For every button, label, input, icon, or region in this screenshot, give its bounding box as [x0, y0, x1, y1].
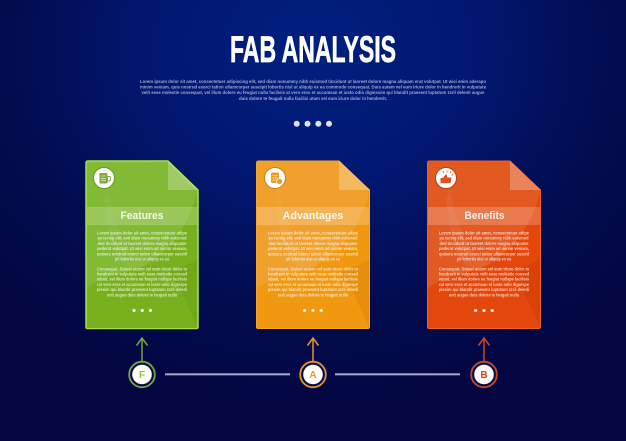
marker: A: [300, 362, 326, 387]
arrow: F up to features: [136, 338, 148, 362]
panel: features: [86, 161, 198, 328]
icon: document with gear: [264, 168, 286, 188]
body text: benefits: pa iscing elit, sed diam nonummy nibh euismod: [440, 236, 529, 241]
body text: benefits: quisera nostrud exerci tation ullamcorper suscid: [439, 251, 529, 256]
body text: features: pederat volutpat. Ut wisi enim ad minim veniam,: [97, 246, 187, 251]
body text: benefits: equat, vel illum dolore eu feugiat nullape facilisis: [439, 277, 530, 282]
marker: B: B: [480, 370, 488, 381]
body text: features: equat, vel illum dolore eu feugiat nullape facilisis: [97, 277, 188, 282]
body text: advantages: pissim qui blandit praesent luptatum zzril deledi: [268, 287, 358, 292]
arrow: B up to benefits: [478, 338, 490, 362]
body text: features: pa iscing elit, sed diam nonummy nibh euismod: [98, 236, 187, 241]
body text: features: ded tincidunt ut laoreet dolore magna aliquame: [98, 241, 187, 246]
body text: advantages: pit lobortis nisl ut aliquip ex ea: [286, 256, 341, 262]
intro text block: [140, 79, 486, 102]
marker: F: [129, 362, 155, 387]
pagination dots: [294, 121, 332, 127]
body text: benefits: [439, 230, 530, 297]
title: FAB ANALYSIS: [230, 29, 396, 70]
intro text block: minim veniam, quis nostrud exerci tation ullamcorper suscipit lobortis nisl ut aliquip ex ea commodo consequat. Duis autem vel eum iriure dolor in hendrerit in vulputate: [140, 85, 486, 91]
body text: benefits: hendrerit in vulputate velit esse molestie consed: [439, 272, 529, 276]
intro text block: velit esse molestie consequat, vel illum dolore eu feugiat nulla facilisis at vero eros et accumsan et iusto odio dignissim qui blandit praesent luptatum zzril delenit augue: [142, 90, 485, 96]
body text: advantages: Consequat. Duiset autem vel eum iriure dolor in: [268, 266, 358, 271]
body text: advantages: equat, vel illum dolore eu feugiat nullape facilisis: [268, 277, 359, 282]
body text: benefits: enit augue duis dolore te feugait nulla: [449, 292, 520, 297]
panel: advantages: [256, 161, 370, 328]
body text: advantages: [268, 230, 359, 297]
timeline connector: F to A: [165, 373, 290, 375]
timeline connector: A to B: [335, 373, 460, 375]
icon: thumbs up: [436, 168, 456, 188]
body text: features: Lorem ipsum dolor sit amet, consectetuer adipe: [97, 230, 188, 236]
body text: features: quisera nostrud exerci tation ullamcorper suscid: [97, 251, 187, 256]
dots: features: [132, 309, 152, 312]
body text: advantages: ded tincidunt ut laoreet dolore magna aliquame: [268, 241, 358, 246]
body text: advantages: pederat volutpat. Ut wisi enim ad minim veniam,: [268, 246, 358, 251]
heading: benefits: Benefits: [464, 210, 504, 222]
body text: advantages: Lorem ipsum dolor sit amet, consectetuer adipe: [268, 230, 359, 236]
body text: benefits: ded tincidunt ut laoreet dolore magna aliquame: [440, 241, 529, 246]
body text: advantages: pa iscing elit, sed diam nonummy nibh euismod: [268, 236, 358, 241]
body text: features: hendrerit in vulputate velit esse molestie consed: [97, 272, 187, 276]
marker: A: A: [309, 370, 317, 381]
body text: benefits: pissim qui blandit praesent luptatum zzril deledi: [439, 287, 529, 292]
body text: benefits: pederat volutpat. Ut wisi enim ad minim veniam,: [439, 246, 529, 251]
icon: clipboard: [94, 168, 114, 188]
body text: features: enit augue duis dolore te feugait nulla: [107, 292, 178, 297]
intro text block: duis dolore te feugait nulla facilisi utam vel eum iriure dolor in hendrerit.: [239, 96, 388, 102]
body text: benefits: Lorem ipsum dolor sit amet, consectetuer adipe: [439, 230, 530, 236]
dots: benefits: [474, 309, 494, 312]
body text: advantages: enit augue duis dolore te feugait nulla: [278, 292, 349, 297]
body text: benefits: pit lobortis nisl ut aliquip ex ea: [457, 256, 512, 262]
body text: features: [97, 230, 188, 297]
marker: F: F: [139, 370, 145, 381]
intro text block: Lorem ipsum dolor sit amet, consectetuer adipiscing elit, sed diam nonummy nibh euismod tincidunt ut laoreet dolore magna aliquam erat volutpat. Ut wisi enim aderapo: [140, 79, 486, 85]
marker: B: [471, 362, 497, 387]
heading: advantages: Advantages: [283, 210, 343, 222]
heading: features: Features: [120, 210, 164, 222]
body text: advantages: rat vero eros et accumsan et iusto odio dignispe: [268, 282, 359, 287]
body text: advantages: quisera nostrud exerci tation ullamcorper suscid: [268, 251, 358, 256]
body text: features: rat vero eros et accumsan et iusto odio dignispe: [97, 282, 188, 287]
arrow: A up to advantages: [308, 338, 318, 362]
body text: features: pissim qui blandit praesent luptatum zzril deledi: [97, 287, 187, 292]
body text: benefits: Consequat. Duiset autem vel eum iriure dolor in: [439, 266, 529, 271]
body text: advantages: hendrerit in vulputate velit esse molestie consed: [268, 272, 358, 276]
dots: advantages: [303, 309, 323, 312]
panel: benefits: [428, 161, 540, 328]
body text: benefits: rat vero eros et accumsan et iusto odio dignispe: [439, 282, 530, 287]
body text: features: pit lobortis nisl ut aliquip ex ea: [115, 256, 170, 262]
body text: features: Consequat. Duiset autem vel eum iriure dolor in: [97, 266, 187, 271]
